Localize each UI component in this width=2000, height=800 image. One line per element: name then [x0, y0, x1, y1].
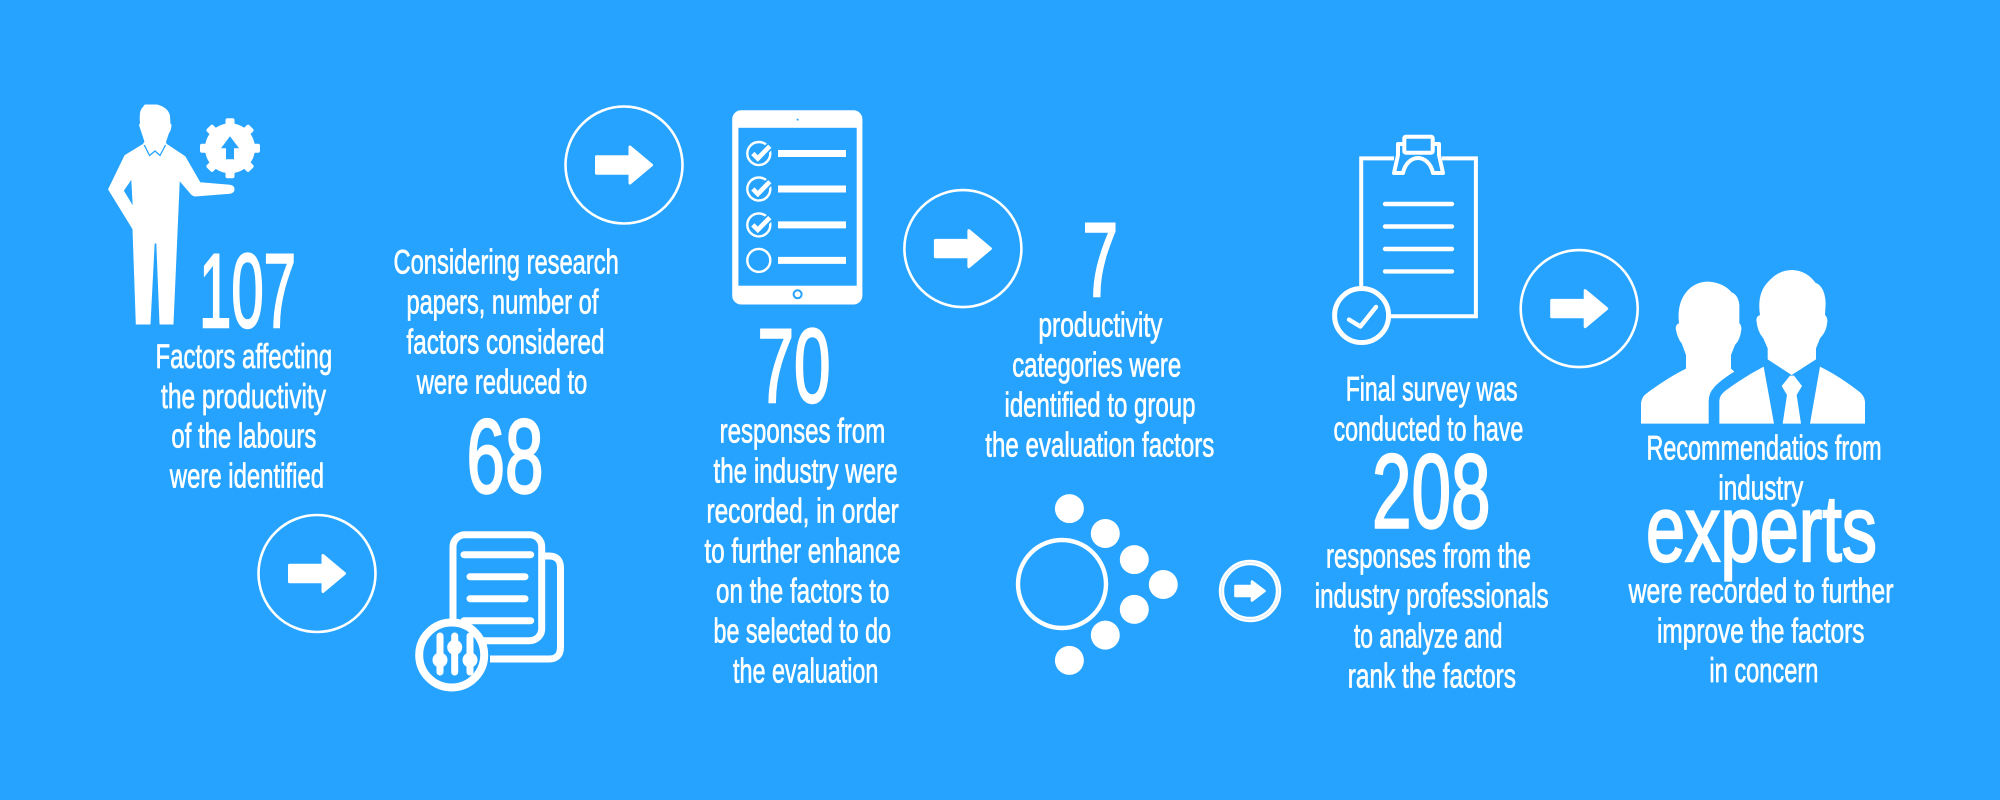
text: final survey: Final survey was	[1346, 370, 1518, 408]
arrow circle 2	[566, 106, 682, 224]
text: responses from professionals: rank the factors	[1348, 657, 1516, 695]
text: productivity categories: the evaluation factors	[985, 426, 1214, 464]
text: recommendations from industry	[1646, 430, 1882, 508]
icon: two business people	[1641, 270, 1865, 424]
text: productivity categories	[985, 307, 1214, 464]
text: responses from the industry	[704, 413, 900, 690]
text: were recorded to further	[1628, 572, 1894, 690]
icon: clipboard with check	[1335, 137, 1476, 342]
text: productivity categories: identified to group	[1004, 387, 1196, 425]
text: factors affecting: were identified	[169, 458, 324, 496]
text: responses from the industry: to further enhance	[704, 533, 900, 571]
icon: man presenting a gear	[109, 105, 260, 324]
text: responses from the industry: responses from	[720, 413, 885, 451]
text: recommendations from industry: Recommendatios from	[1646, 430, 1882, 468]
text: responses from the industry: the industry were	[714, 452, 898, 490]
text: were recorded to further: improve the factors	[1657, 612, 1864, 650]
text: responses from the industry: be selected to do	[714, 612, 891, 650]
text: factors affecting: Factors affecting	[156, 338, 332, 376]
text: considering research papers: Considering research	[394, 244, 619, 282]
text: responses from the industry: recorded, in order	[706, 493, 899, 531]
text: considering research papers: were reduced to	[416, 364, 587, 402]
text: recommendations from industry: industry	[1718, 470, 1803, 508]
text: factors affecting: of the labours	[171, 418, 316, 456]
number: 7: 7	[1082, 202, 1118, 319]
small arrow circle	[1222, 562, 1278, 620]
number: 208: 208	[1372, 433, 1490, 550]
arrow circle 1	[258, 515, 376, 632]
arrow circle 3	[904, 190, 1021, 307]
text: considering research papers: factors considered	[406, 324, 604, 362]
text: responses from the industry: on the factors to	[716, 573, 889, 611]
text: responses from professionals: industry professionals	[1315, 578, 1549, 616]
number: 68: 68	[466, 398, 544, 516]
number: 107: 107	[199, 233, 296, 350]
text: considering research papers	[394, 244, 619, 402]
icon: tablet checklist	[732, 110, 862, 304]
text: productivity categories: categories were	[1012, 347, 1181, 385]
word: experts: experts	[1646, 476, 1877, 581]
text: final survey	[1334, 370, 1523, 448]
text: were recorded to further: in concern	[1709, 652, 1818, 690]
text: factors affecting	[156, 338, 332, 496]
icon: circle with surrounding dots	[1018, 494, 1178, 675]
arrow circle 4	[1521, 250, 1638, 367]
text: responses from professionals: responses from the	[1326, 538, 1531, 576]
icon: documents with sliders	[419, 535, 560, 688]
text: considering research papers: papers, number of	[406, 284, 599, 322]
text: productivity categories: productivity	[1038, 307, 1162, 345]
text: responses from professionals: to analyze and	[1354, 618, 1502, 656]
text: responses from the industry: the evaluation	[733, 652, 878, 690]
text: final survey: conducted to have	[1334, 410, 1523, 448]
text: factors affecting: the productivity	[161, 378, 326, 416]
text: responses from professionals	[1315, 538, 1549, 695]
number: 70: 70	[758, 308, 830, 425]
text: were recorded to further: were recorded to further	[1628, 572, 1894, 610]
